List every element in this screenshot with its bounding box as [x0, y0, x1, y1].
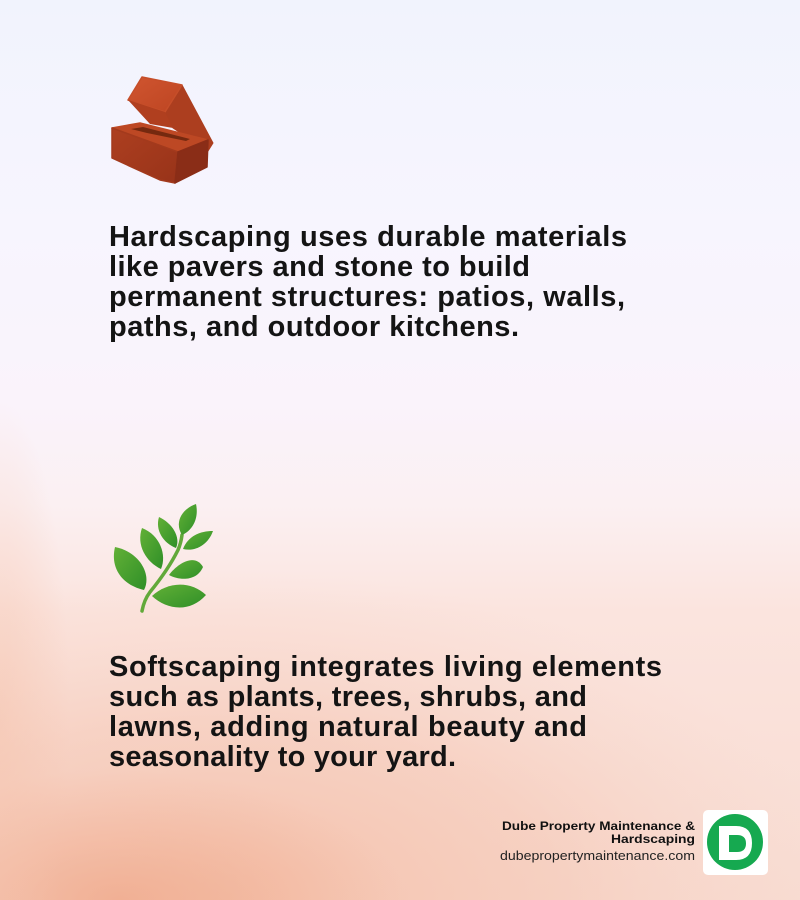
text block: softscaping: Softscaping integrates living elements — [109, 651, 662, 683]
text block: softscaping: seasonality to your yard. — [109, 741, 456, 773]
text block: softscaping: lawns, adding natural beauty and — [109, 711, 587, 743]
text block: hardscaping: Hardscaping uses durable materials — [109, 221, 627, 253]
text block: hardscaping: like pavers and stone to build — [109, 251, 530, 283]
footer: company name: Hardscaping — [611, 832, 695, 846]
icon: leaf sprig — [114, 504, 213, 611]
footer: company name: Dube Property Maintenance & — [502, 819, 695, 833]
logo — [703, 810, 768, 875]
footer: website: dubepropertymaintenance.com — [500, 848, 695, 863]
text block: hardscaping — [109, 221, 627, 343]
text block: softscaping — [109, 651, 662, 773]
text block: softscaping: such as plants, trees, shrubs, and — [109, 681, 587, 713]
icon: brick — [112, 77, 213, 183]
text block: hardscaping: permanent structures: patios, walls, — [109, 281, 625, 313]
text block: hardscaping: paths, and outdoor kitchens. — [109, 311, 519, 343]
footer: company name — [502, 819, 695, 846]
